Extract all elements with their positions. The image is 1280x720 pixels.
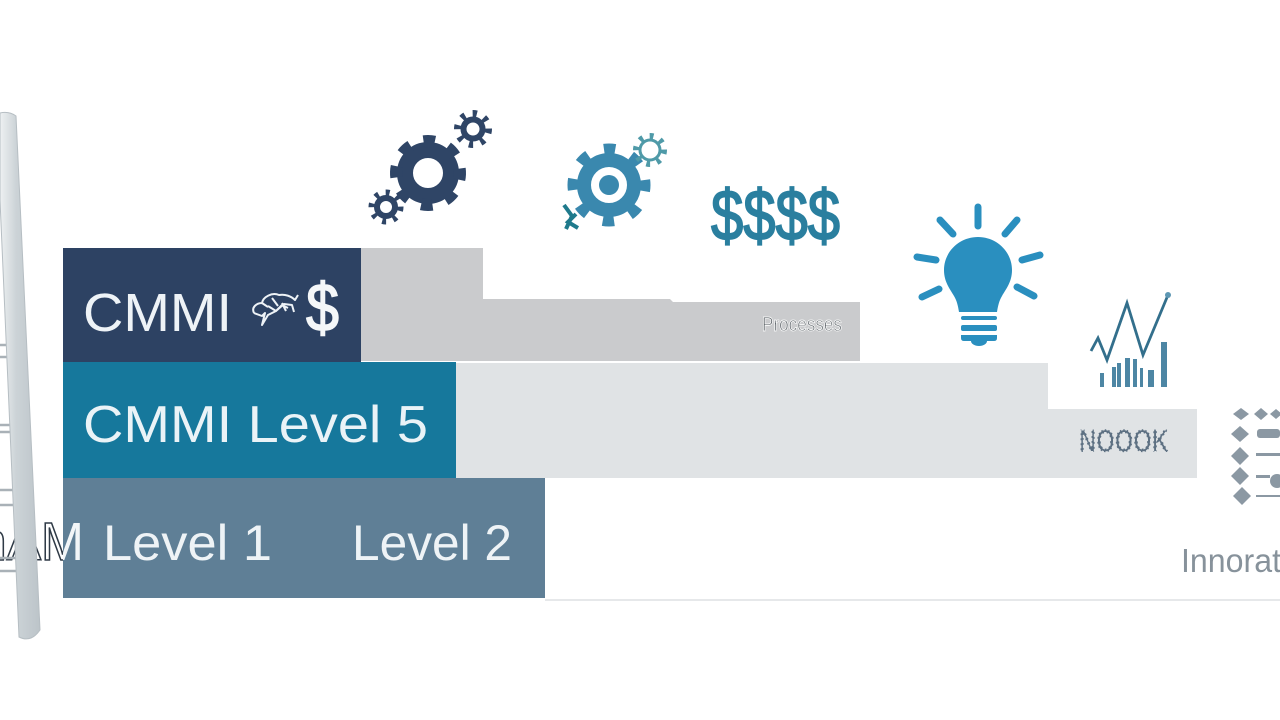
icon: ladder [0, 112, 40, 639]
panel: Level 1 and Level 2 slate bar [63, 478, 545, 598]
infographic canvas [0, 110, 1280, 640]
icon: line and bar chart [1091, 292, 1171, 387]
text: garbled dotted label in middle grey step: NOOOK [1079, 423, 1169, 459]
panel: CMMI navy bar [63, 248, 361, 362]
text: CMMI Level 5: CMMI Level 5 [83, 396, 428, 454]
text: Level 1: Level 1 [103, 515, 272, 571]
text: clipped M fragment inside bar: M [41, 512, 84, 572]
icon: right-edge diagram of nodes [1231, 408, 1280, 505]
icon: light bulb [917, 207, 1040, 346]
icon: four dollar signs: $$$$ [711, 177, 840, 256]
panel: middle row grey staircase [456, 363, 1197, 478]
icon: brain scribble [253, 294, 298, 325]
text: CMMI: CMMI [83, 283, 232, 343]
panel: top row grey staircase [361, 248, 860, 361]
text: garbled label in top grey step: Processes [762, 314, 842, 336]
text: Level 2: Level 2 [352, 515, 512, 571]
icon: dollar sign: $ [306, 270, 339, 346]
icon: navy gear cluster [372, 114, 488, 221]
panel: baseline rule [545, 599, 1280, 601]
panel: CMMI Level 5 teal bar [63, 362, 456, 478]
icon: teal gear cluster [564, 136, 664, 229]
